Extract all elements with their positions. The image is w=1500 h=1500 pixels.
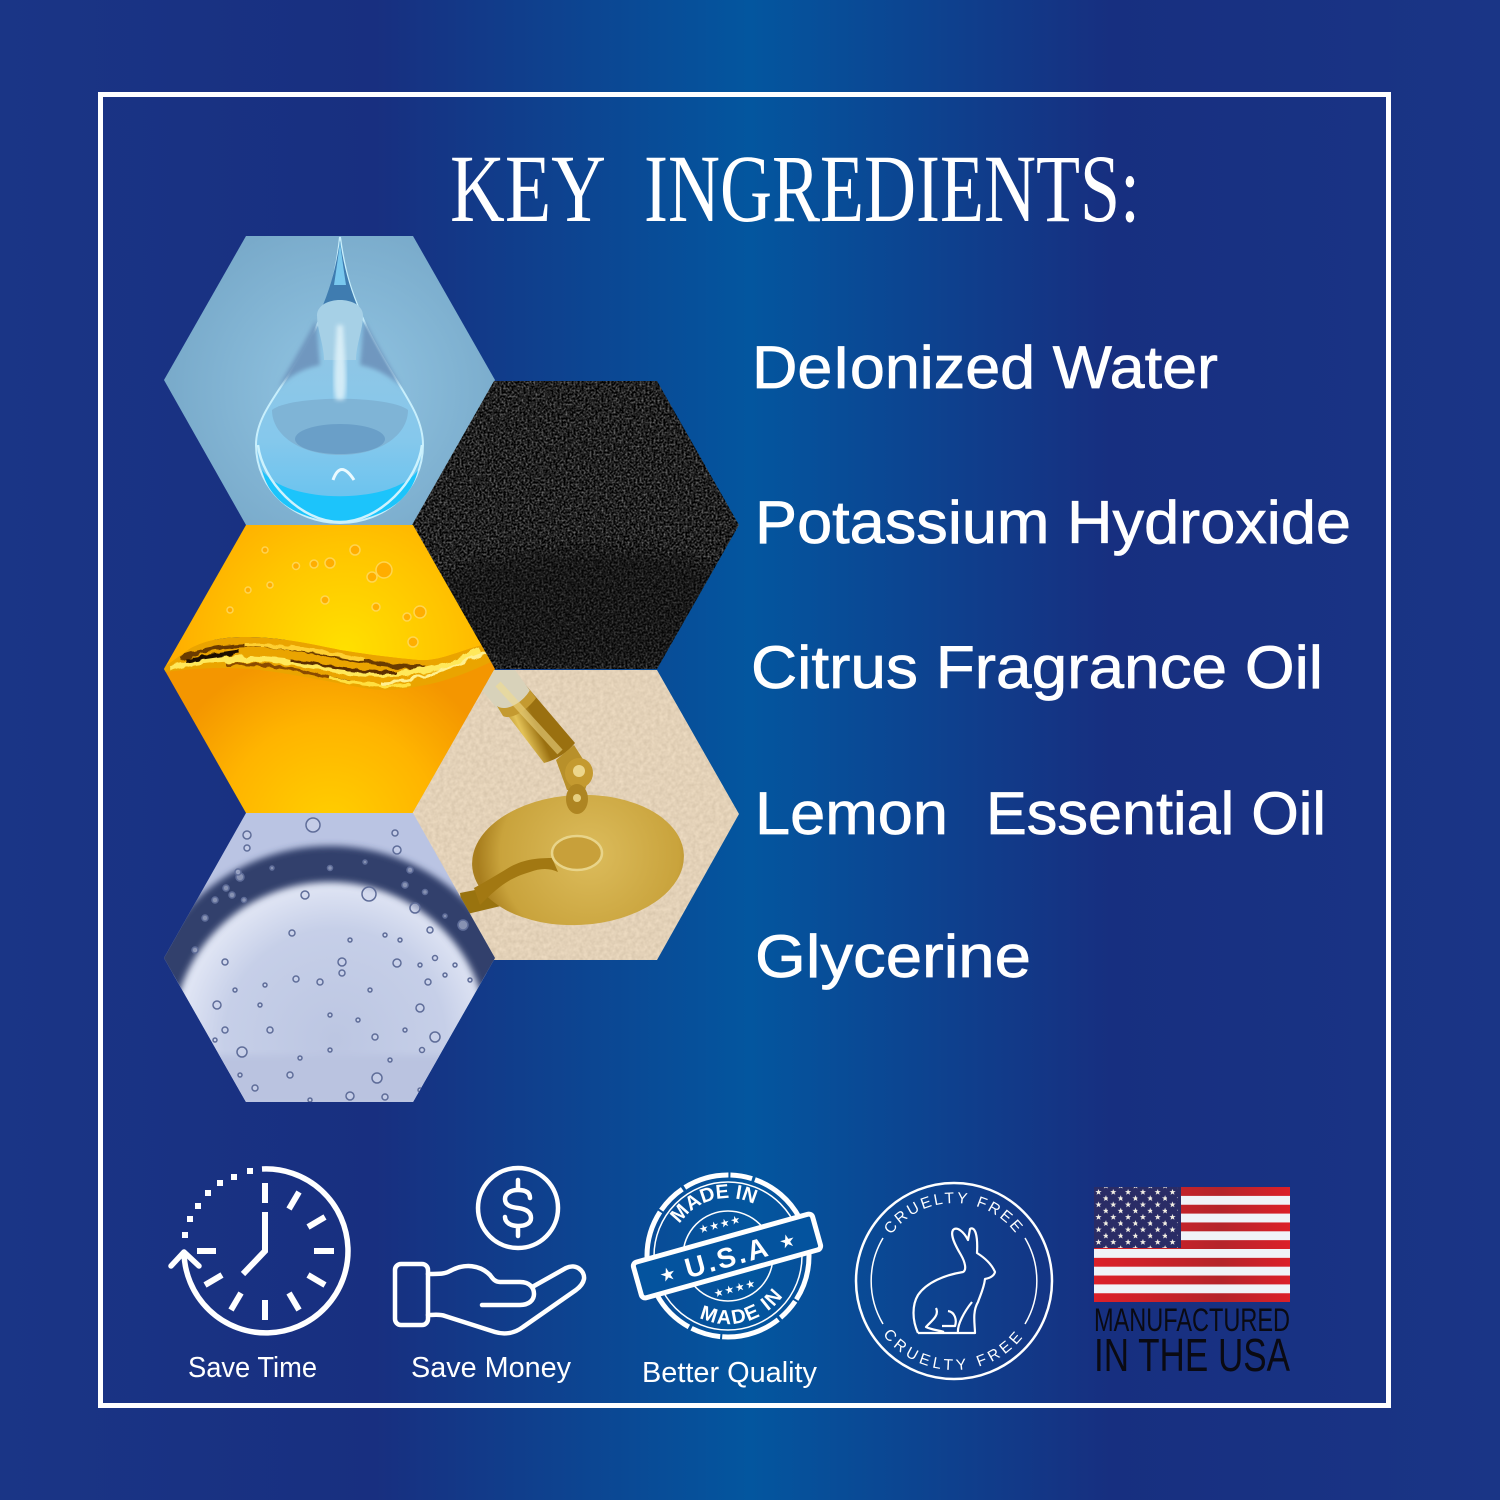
hexagon: black powder	[410, 378, 760, 672]
oil puddle	[472, 795, 684, 926]
ingredient: lemon essential oil: Essential Oil	[986, 780, 1326, 847]
glass pipette	[480, 670, 575, 763]
ingredient: potassium hydroxide: Potassium Hydroxide	[755, 489, 1351, 556]
label: better quality: Better Quality	[642, 1357, 817, 1389]
ingredient: lemon essential oil: Lemon	[755, 780, 948, 847]
label: save money: Save Money	[411, 1352, 571, 1384]
white frame	[100, 94, 1388, 1406]
icon: made in usa stamp: ★★★★	[713, 1278, 758, 1300]
title: INGREDIENTS:	[644, 135, 1140, 242]
icon: water drop	[256, 237, 423, 523]
hexagon: glycerine gel	[164, 813, 495, 1102]
gel bubbles	[192, 818, 472, 1102]
title	[450, 135, 1140, 242]
icon: made in usa stamp	[630, 1172, 824, 1340]
manufactured in the usa text: IN THE USA	[1094, 1329, 1290, 1381]
hexagon: water drop	[160, 232, 500, 528]
icon: made in usa stamp: U.S.A	[681, 1231, 774, 1284]
title: KEY	[450, 135, 606, 242]
icon: rabbit	[914, 1228, 995, 1333]
hexagon: golden oil	[160, 522, 500, 816]
manufactured in the usa text: MANUFACTURED	[1094, 1302, 1290, 1338]
oil bubbles	[227, 545, 426, 647]
ingredient list	[751, 334, 1351, 990]
icon: money in hand	[395, 1168, 584, 1333]
icon: made in usa stamp: ★★★★	[698, 1214, 743, 1236]
icon: made in usa stamp: ★	[657, 1263, 678, 1286]
ingredient: glycerine: Glycerine	[755, 923, 1031, 990]
ingredient: lemon essential oil	[755, 780, 1326, 847]
icon: cruelty free badge: CRUELTY FREE	[885, 1330, 1022, 1370]
icon: cruelty free badge	[854, 1182, 1054, 1380]
icon: cruelty free badge: CRUELTY FREE	[885, 1192, 1023, 1233]
oil drip	[556, 745, 593, 814]
ingredient: deionized water: DeIonized Water	[752, 334, 1218, 401]
icon: made in usa stamp: ★	[777, 1229, 798, 1253]
manufactured in the usa text	[1094, 1302, 1290, 1381]
icon: made in usa stamp: MADE IN	[670, 1184, 758, 1223]
icon: made in usa stamp: MADE IN	[700, 1288, 782, 1324]
icon: clock	[171, 1168, 348, 1333]
icon: american flag	[1094, 1187, 1290, 1302]
label: save time: Save Time	[188, 1352, 317, 1384]
dropper shadow	[460, 890, 500, 914]
hexagon: oil dropper	[410, 668, 742, 963]
ingredient: citrus fragrance oil: Citrus Fragrance Oil	[751, 634, 1323, 701]
oil wave	[160, 637, 500, 690]
